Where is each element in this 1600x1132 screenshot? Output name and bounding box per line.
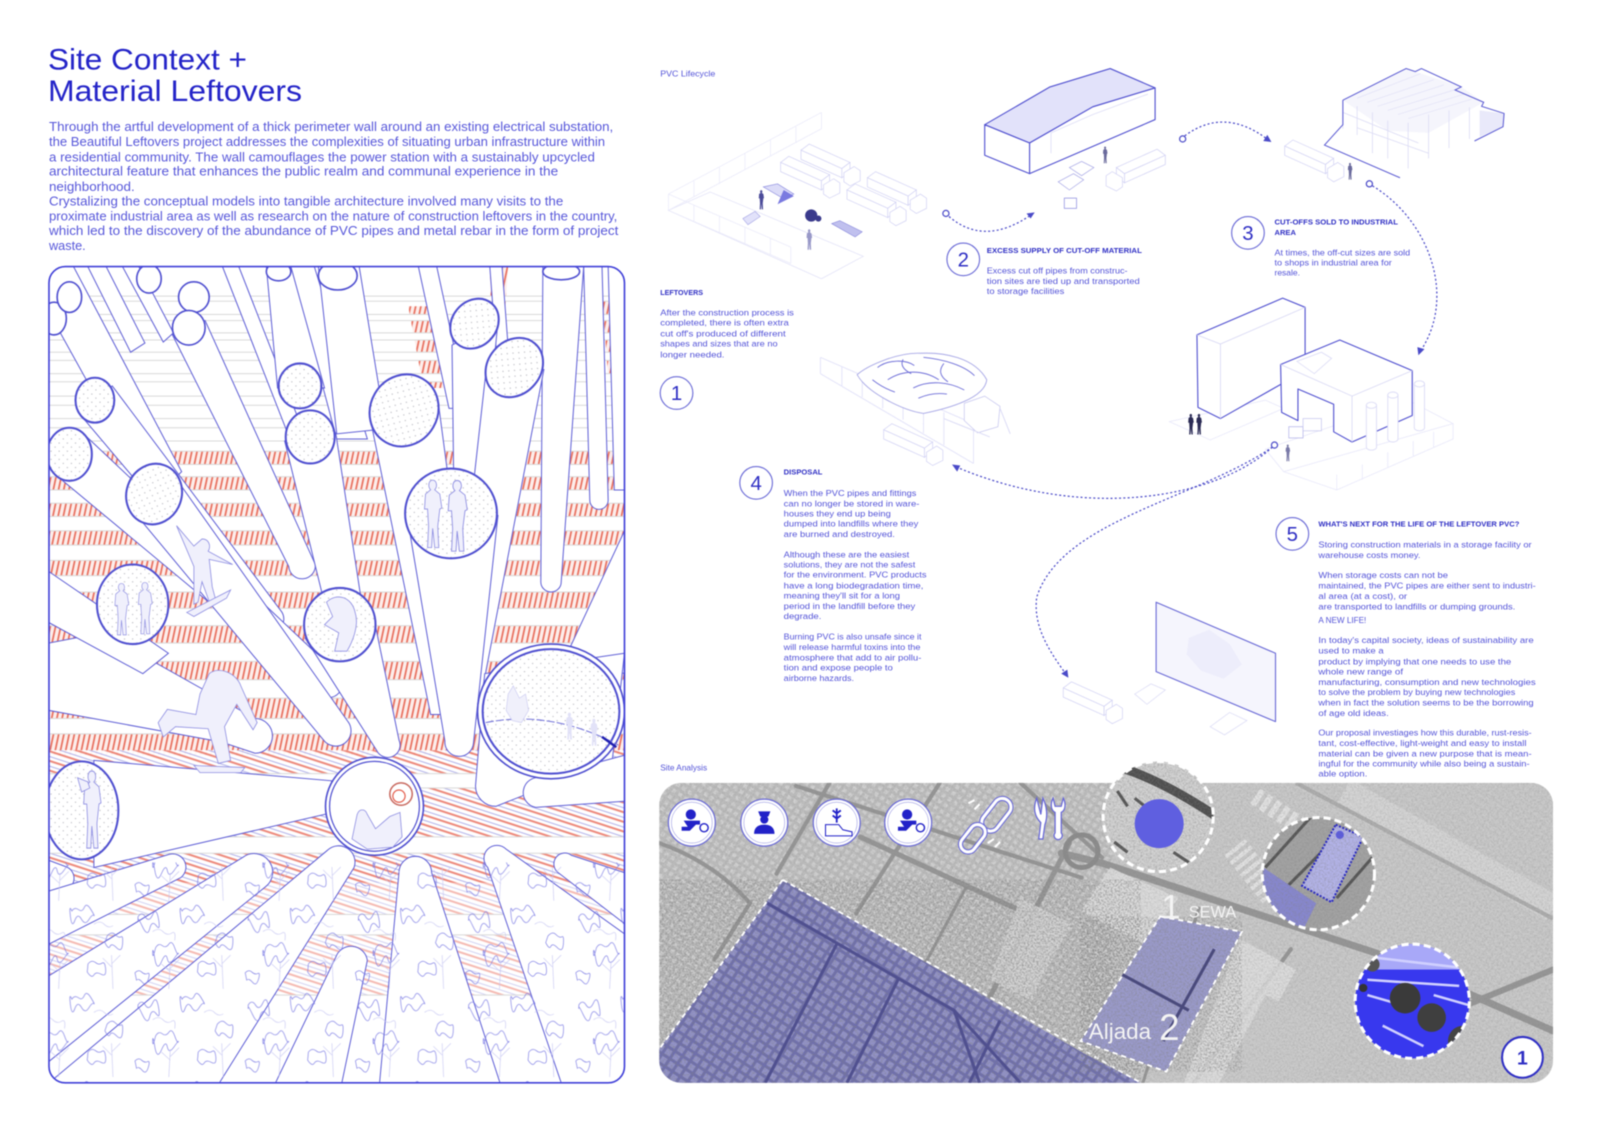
number 4 with text: disposal: dumped into landfills where they	[784, 519, 919, 529]
number 5 with text: what's next: warehouse costs money.	[1317, 550, 1420, 560]
heading: Site Analysis: Site Analysis	[660, 763, 707, 773]
number 4 with text: disposal: solutions, they are not the safest	[784, 560, 916, 570]
magnified circle: site plot	[1260, 817, 1378, 934]
text: leftovers: cut off's produced of different	[660, 328, 786, 338]
text: leftovers: LEFTOVERS	[660, 288, 703, 297]
upper thin pipes	[49, 267, 624, 674]
intro text block: the Beautiful Leftovers project addresses the complexities of situating urban infrastructure within	[49, 135, 605, 149]
map labels	[1089, 889, 1236, 1048]
text: leftovers: shapes and sizes that are no	[660, 339, 778, 349]
map labels: Aljada	[1089, 1019, 1152, 1044]
circle: two children holding hands	[97, 564, 168, 644]
number 5 with text: what's next: ingful for the community while also being a sustain-	[1318, 759, 1530, 769]
illustration: landfill	[820, 353, 1010, 465]
number 5 with text: what's next: tant, cost-effective, light-weight and easy to install	[1318, 738, 1527, 748]
number 5 with text: what's next: Storing construction materials in a storage facility or	[1318, 540, 1532, 550]
number 3 with text: cut-offs sold: AREA	[1274, 228, 1296, 237]
number 3 with text: cut-offs sold: to shops in industrial area for	[1274, 257, 1392, 267]
title: Material Leftovers	[48, 75, 302, 108]
number 5 with text: what's next: A NEW LIFE!	[1318, 615, 1366, 625]
number 5 with text: what's next: In today's capital society, ideas of sustainability are	[1318, 635, 1534, 645]
number 4 with text: disposal: 4	[750, 473, 762, 495]
circle: crouching figure	[304, 588, 376, 661]
number 3 with text: cut-offs sold: At times, the off-cut sizes are sold	[1274, 247, 1411, 257]
number 5 with text: what's next: are transported to landfills or dumping grounds.	[1318, 601, 1515, 611]
number 1	[660, 377, 693, 409]
number 2 with text: excess supply: tion sites are tied up and transported	[987, 276, 1140, 286]
illustration: shop building on industrial lot	[1285, 69, 1504, 182]
number 5 with text: what's next: WHAT'S NEXT FOR THE LIFE OF THE LEFTOVER PVC?	[1318, 520, 1520, 529]
heading: PVC Lifecycle: PVC Lifecycle	[660, 69, 716, 79]
number 5 with text: what's next: When storage costs can not be	[1318, 570, 1448, 580]
arrow: leftovers to storage	[943, 210, 1035, 231]
arrow: fabrication back to landfill and onward	[952, 442, 1278, 678]
number 4 with text: disposal: are burned and destroyed.	[784, 529, 895, 539]
number 4 with text: disposal: airborne hazards.	[784, 673, 854, 683]
icon: officer	[741, 799, 788, 846]
text: leftovers: After the construction process is	[660, 307, 794, 317]
number 4 with text: disposal	[740, 467, 927, 683]
number 5 with text: what's next	[1276, 518, 1536, 779]
icon: worker with tap, repeated	[885, 799, 932, 846]
number 5 with text: what's next: whole new range of	[1317, 667, 1404, 677]
dotted pipe ends	[47, 289, 555, 532]
intro text block: waste.	[48, 239, 86, 253]
number 4 with text: disposal: meaning they'll sit for a long	[784, 591, 900, 601]
number 4 with text: disposal: houses they end up being	[784, 509, 891, 519]
number 5 with text: what's next: of age old ideas.	[1318, 708, 1389, 718]
circle: hub with group and ball	[326, 757, 423, 855]
number 1: 1	[671, 383, 682, 405]
arrow: shops to fabrication	[1366, 181, 1437, 355]
number 4 with text: disposal: can no longer be stored in ware-	[784, 498, 920, 508]
number 2 with text: excess supply: EXCESS SUPPLY OF CUT-OFF MATERIAL	[987, 246, 1142, 255]
title: Site Context +	[48, 44, 247, 77]
number 5 with text: what's next: when in fact the solution seems to be the borrowing	[1317, 697, 1534, 707]
number 4 with text: disposal: have a long biodegradation time,	[784, 580, 923, 590]
number 4 with text: disposal: will release harmful toxins into the	[783, 642, 921, 652]
icon: pliers and wrench	[1035, 798, 1065, 840]
number 5 with text: what's next: able option.	[1318, 769, 1367, 779]
figure: skateboarder	[177, 526, 233, 617]
intro text block: a residential community. The wall camouflages the power station with a sustainably upcycled	[49, 150, 595, 164]
number 5 with text: what's next: Our proposal investiages how this durable, rust-resis-	[1318, 727, 1532, 737]
illustration: truck delivering to wall screen	[1063, 602, 1276, 735]
plain pipe ends	[42, 261, 580, 345]
number 5 with text: what's next: to solve the problem by buying new technologies	[1318, 687, 1515, 697]
number 1 badge: 1	[1517, 1047, 1528, 1069]
hatching behind the pipes	[49, 266, 624, 996]
number 2 with text: excess supply: Excess cut off pipes from construc-	[987, 266, 1128, 276]
tree overlay	[49, 862, 624, 1083]
panel: perspective drawing of pipes	[41, 261, 633, 1097]
intro text block: Crystalizing the conceptual models into tangible architecture involved many visits to the	[49, 194, 563, 208]
icon: broken chain	[957, 795, 1014, 855]
text: leftovers: longer needed.	[660, 349, 724, 359]
number 5 with text: what's next: maintained, the PVC pipes are either sent to industri-	[1318, 580, 1536, 590]
number 4 with text: disposal: When the PVC pipes and fittings	[784, 488, 916, 498]
number 1 badge	[1502, 1037, 1543, 1078]
number 4 with text: disposal: for the environment. PVC products	[784, 570, 927, 580]
pipes in the lower half	[49, 845, 624, 1083]
roads	[659, 783, 1553, 1083]
illustration: fabrication building	[1169, 298, 1453, 490]
number 4 with text: disposal: tion and expose people to	[784, 663, 893, 673]
number 5 with text: what's next: 5	[1287, 524, 1298, 546]
icon: plant on boot	[813, 799, 860, 846]
circle: figure photographing	[45, 761, 118, 859]
text: leftovers	[660, 288, 794, 359]
intro text block: proximate industrial area as well as research on the nature of construction leftovers in the country,	[49, 210, 617, 224]
number 4 with text: disposal: Burning PVC is also unsafe since it	[784, 631, 922, 641]
arrow: storage to industrial shops	[1180, 122, 1271, 142]
title	[48, 44, 302, 108]
number 5 with text: what's next: manufacturing, consumption and new technologies	[1318, 677, 1536, 687]
map labels: 1	[1161, 889, 1181, 927]
number 3 with text: cut-offs sold: 3	[1242, 223, 1254, 245]
number 4 with text: disposal: Although these are the easiest	[784, 549, 910, 559]
number 4 with text: disposal: DISPOSAL	[784, 468, 823, 477]
icon: worker with tap	[668, 799, 715, 846]
number 5 with text: what's next: used to make a	[1318, 646, 1384, 656]
blue district SEWA	[1081, 917, 1242, 1072]
magnified circle: substation aerial	[1102, 760, 1219, 873]
illustration: leftovers lot with trucks	[668, 112, 927, 279]
text: leftovers: completed, there is often extra	[660, 318, 789, 328]
intro text block: which led to the discovery of the abundance of PVC pipes and metal rebar in the form of project	[48, 224, 619, 238]
number 2 with text: excess supply: 2	[958, 250, 969, 272]
number 4 with text: disposal: degrade.	[784, 611, 821, 621]
number 4 with text: disposal: atmosphere that add to air pollu-	[784, 652, 922, 662]
map labels: 2	[1159, 1007, 1180, 1048]
number 3 with text: cut-offs sold	[1232, 217, 1411, 278]
number 4 with text: disposal: period in the landfill before they	[784, 601, 916, 611]
intro text block: Through the artful development of a thick perimeter wall around an existing electrical substation,	[49, 120, 613, 134]
illustration: storage warehouse	[985, 69, 1165, 208]
circle: two people standing	[405, 469, 497, 558]
pipes ending toward the hub, upper half	[49, 267, 624, 868]
intro text block: neighborhood.	[49, 180, 135, 194]
intro text block	[48, 120, 619, 253]
number 5 with text: what's next: product by implying that one needs to use the	[1318, 656, 1512, 666]
number 3 with text: cut-offs sold: CUT-OFFS SOLD TO INDUSTRIAL	[1274, 218, 1398, 227]
magnified circle: street view	[1352, 941, 1479, 1063]
figure: running skateboarder	[158, 670, 257, 773]
number 2 with text: excess supply: to storage facilities	[987, 286, 1064, 296]
circle: distant landscape	[478, 644, 624, 779]
runway strips	[1235, 783, 1553, 919]
number 5 with text: what's next: material can be given a new purpose that is mean-	[1318, 748, 1532, 758]
number 3 with text: cut-offs sold: resale.	[1274, 268, 1300, 278]
number 2 with text: excess supply	[947, 243, 1142, 296]
number 5 with text: what's next: al area (at a cost), or	[1318, 591, 1407, 601]
intro text block: architectural feature that enhances the public realm and communal experience in the	[49, 165, 558, 179]
blue district Aljada	[659, 880, 1141, 1083]
map labels: SEWA	[1189, 904, 1236, 922]
panel: site analysis aerial map	[659, 760, 1553, 1083]
